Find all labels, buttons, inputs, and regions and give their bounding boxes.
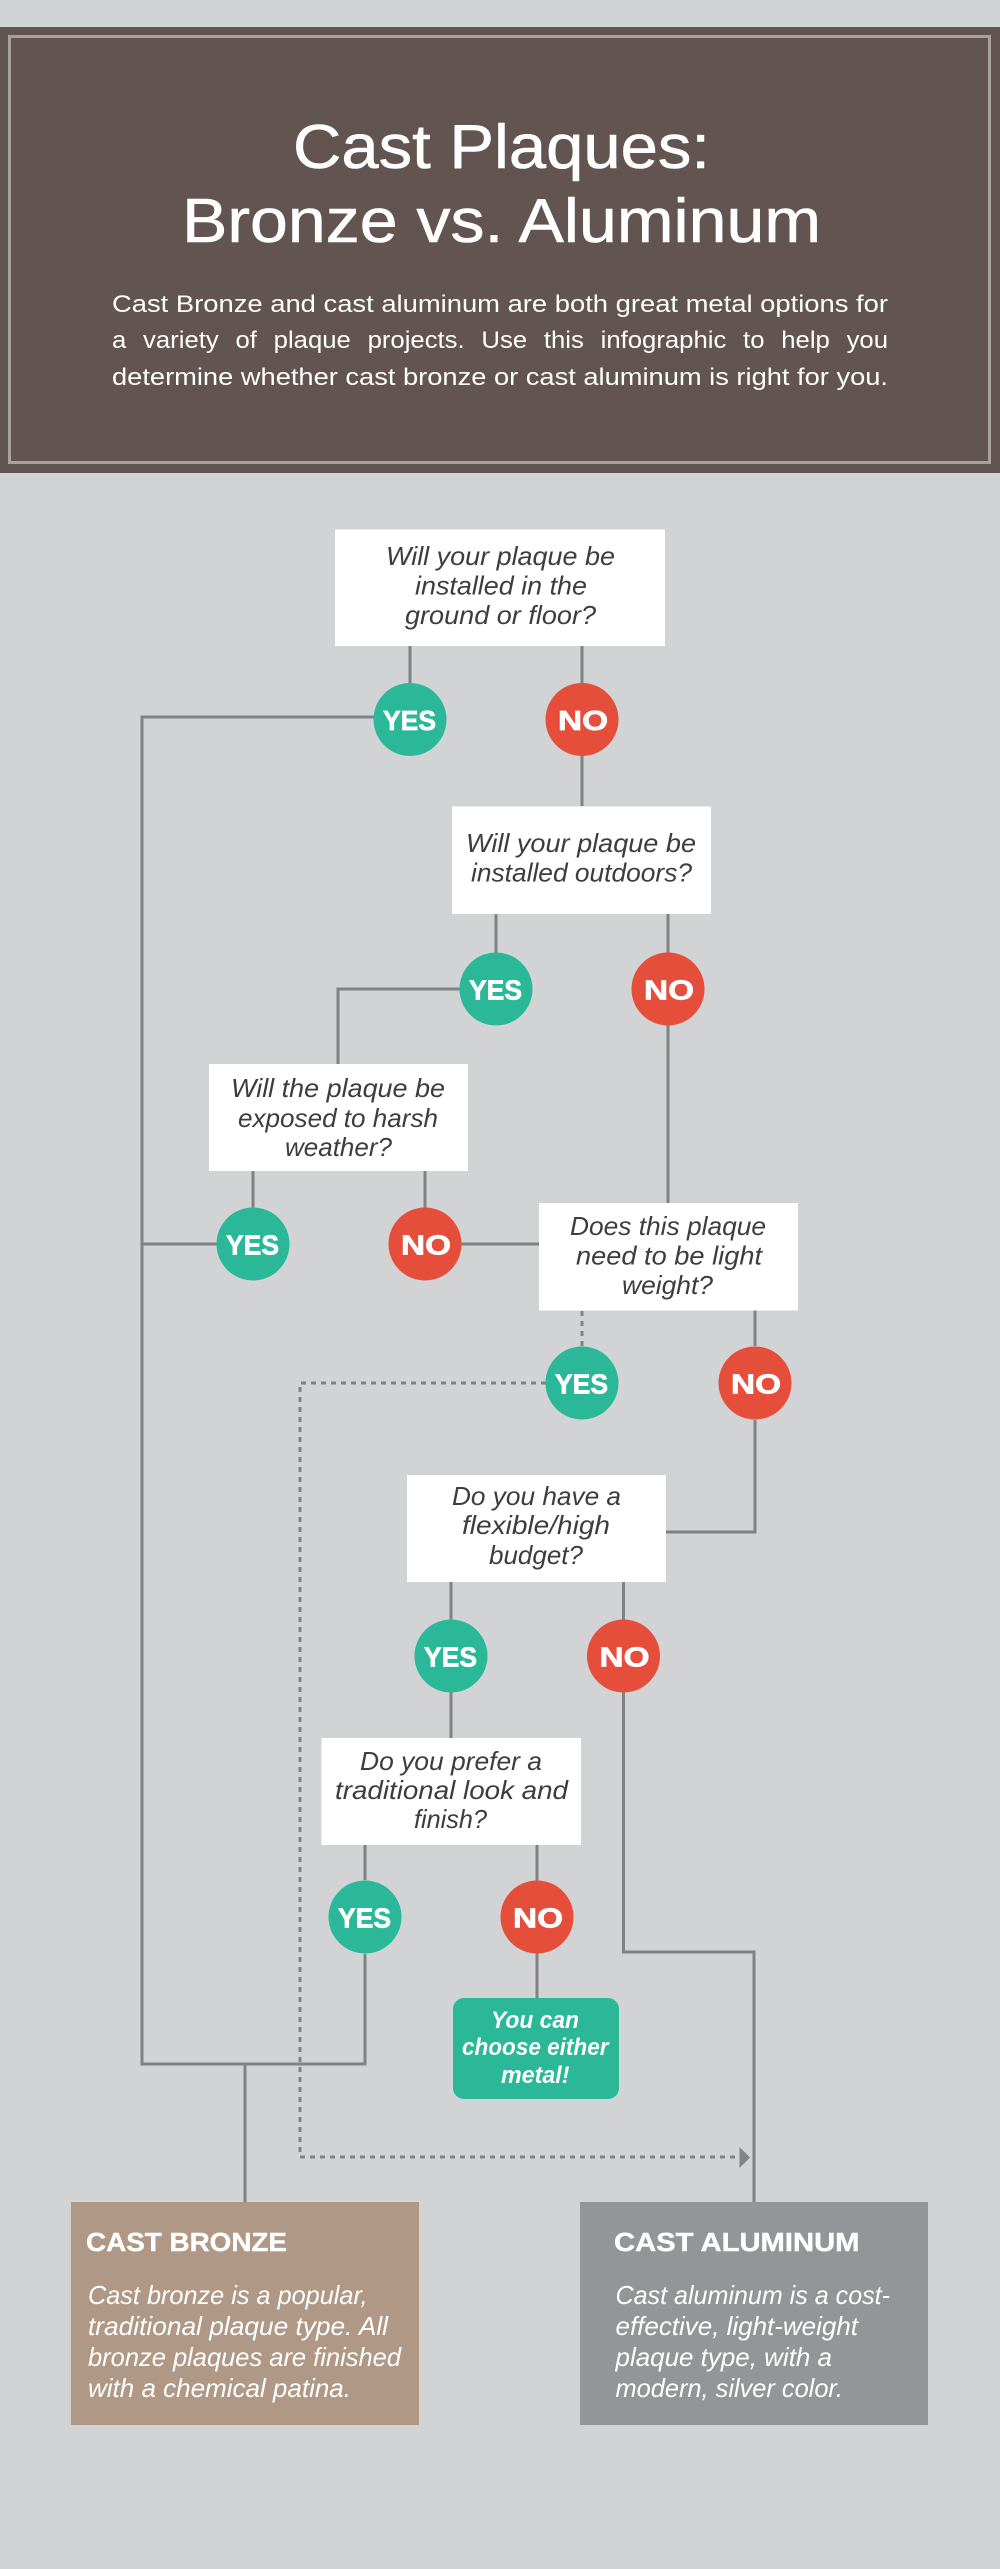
question: harsh weather <box>209 1064 468 1171</box>
question: ground or floor: installed in the <box>415 570 587 600</box>
text: cast bronze description <box>88 2280 402 2403</box>
no circle 6 <box>500 1880 574 1954</box>
text: cast aluminum description: plaque type, with a <box>615 2342 832 2372</box>
no circle 4 <box>718 1346 792 1420</box>
question: traditional look <box>322 1738 581 1845</box>
connector: weather no to light weight question <box>461 1242 539 1246</box>
no circle 1: NO <box>558 705 608 736</box>
callout: choose either metal: You can <box>491 2007 579 2034</box>
text: cast aluminum description: modern, silver color. <box>616 2373 843 2403</box>
connector: ground yes to cast bronze trunk <box>142 717 374 2064</box>
text: cast aluminum description <box>615 2280 890 2403</box>
no circle 4: NO <box>731 1368 781 1400</box>
callout: choose either metal: choose either <box>462 2034 610 2061</box>
yes circle 5: YES <box>424 1642 477 1672</box>
question: light weight: need to be light <box>576 1240 764 1270</box>
no circle 3 <box>388 1208 462 1280</box>
no circle 2: NO <box>644 974 694 1006</box>
connector: weather question to yes and no <box>253 1171 425 1208</box>
intro text: a variety of plaque projects. Use this infographic to help you <box>112 327 888 354</box>
dotted arrow: light weight yes to cast aluminum <box>300 1383 750 2168</box>
panel: cast bronze <box>71 2202 419 2425</box>
title <box>182 113 821 256</box>
yes circle 4: YES <box>555 1368 608 1400</box>
question: budget: budget? <box>489 1540 584 1570</box>
yes circle 6 <box>328 1880 402 1954</box>
intro text: Cast Bronze and cast aluminum are both great metal options for <box>112 291 888 318</box>
question: outdoors: Will your plaque be <box>466 828 696 858</box>
text: cast bronze description: with a chemical patina. <box>88 2373 351 2403</box>
yes circle 1 <box>374 683 446 756</box>
question: harsh weather: Will the plaque be <box>231 1073 445 1103</box>
text: cast bronze description: traditional plaque type. All <box>88 2311 389 2341</box>
question: traditional look: traditional look and <box>335 1775 570 1805</box>
callout: choose either metal <box>453 1998 619 2099</box>
connector: budget no to cast aluminum <box>624 1692 754 2202</box>
connector: outdoors yes to weather question <box>338 989 460 1064</box>
connector: traditional question to yes and no <box>365 1845 537 1998</box>
no circle 2 <box>632 952 704 1026</box>
question: outdoors <box>452 806 711 914</box>
text: cast aluminum description: Cast aluminum is a cost- <box>616 2280 890 2310</box>
question: budget <box>407 1475 666 1582</box>
question: light weight: Does this plaque <box>570 1211 766 1241</box>
question: outdoors: installed outdoors? <box>471 858 693 888</box>
no circle 5: NO <box>600 1642 650 1672</box>
question: traditional look: Do you prefer a <box>360 1746 542 1776</box>
question: harsh weather: exposed to harsh <box>238 1103 438 1133</box>
heading: cast bronze: CAST BRONZE <box>86 2227 287 2257</box>
no circle 1 <box>546 683 618 756</box>
question: budget: flexible/high <box>462 1510 610 1540</box>
title: Bronze vs. Aluminum <box>182 187 821 256</box>
text: cast bronze description: Cast bronze is a popular, <box>88 2280 368 2310</box>
question: light weight <box>539 1203 798 1310</box>
no circle 6: NO <box>513 1902 563 1934</box>
text: cast aluminum description: effective, light-weight <box>616 2311 860 2341</box>
yes circle 4 <box>546 1346 618 1420</box>
question: harsh weather: weather? <box>285 1132 393 1162</box>
yes circle 3: YES <box>226 1230 279 1260</box>
text: cast bronze description: bronze plaques are finished <box>88 2342 402 2372</box>
yes circle 3 <box>216 1208 290 1280</box>
connector: budget question to yes and no <box>451 1582 624 1738</box>
connector: weather yes to trunk <box>142 1242 217 1246</box>
no circle 5 <box>587 1620 660 1692</box>
yes circle 2 <box>460 952 532 1026</box>
connector: outdoors question to yes and no <box>496 914 668 1203</box>
connector: ground question to yes and no <box>410 646 582 806</box>
intro text: determine whether cast bronze or cast aluminum is right for you. <box>112 364 888 391</box>
no circle 3: NO <box>401 1230 451 1260</box>
yes circle 1: YES <box>383 705 436 736</box>
dotted connector: light weight question to yes <box>580 1311 584 1347</box>
panel: cast aluminum <box>580 2202 928 2425</box>
yes circle 2: YES <box>469 974 522 1006</box>
connector: trunk to cast bronze <box>244 2064 246 2202</box>
question: light weight: weight? <box>622 1270 714 1300</box>
intro text <box>112 291 888 391</box>
question: budget: Do you have a <box>452 1481 621 1511</box>
yes circle 6: YES <box>338 1902 391 1934</box>
callout: choose either metal: metal! <box>501 2062 570 2089</box>
header panel <box>0 27 1000 473</box>
heading: cast aluminum: CAST ALUMINUM <box>614 2227 860 2257</box>
title: Cast Plaques: <box>293 113 710 182</box>
yes circle 5 <box>414 1620 488 1692</box>
question: ground or floor: ground or floor? <box>405 600 597 630</box>
question: traditional look: finish? <box>414 1804 488 1834</box>
connector: light weight no to budget question <box>666 1310 755 1532</box>
question: ground or floor <box>335 530 665 646</box>
question: ground or floor: Will your plaque be <box>386 541 615 571</box>
